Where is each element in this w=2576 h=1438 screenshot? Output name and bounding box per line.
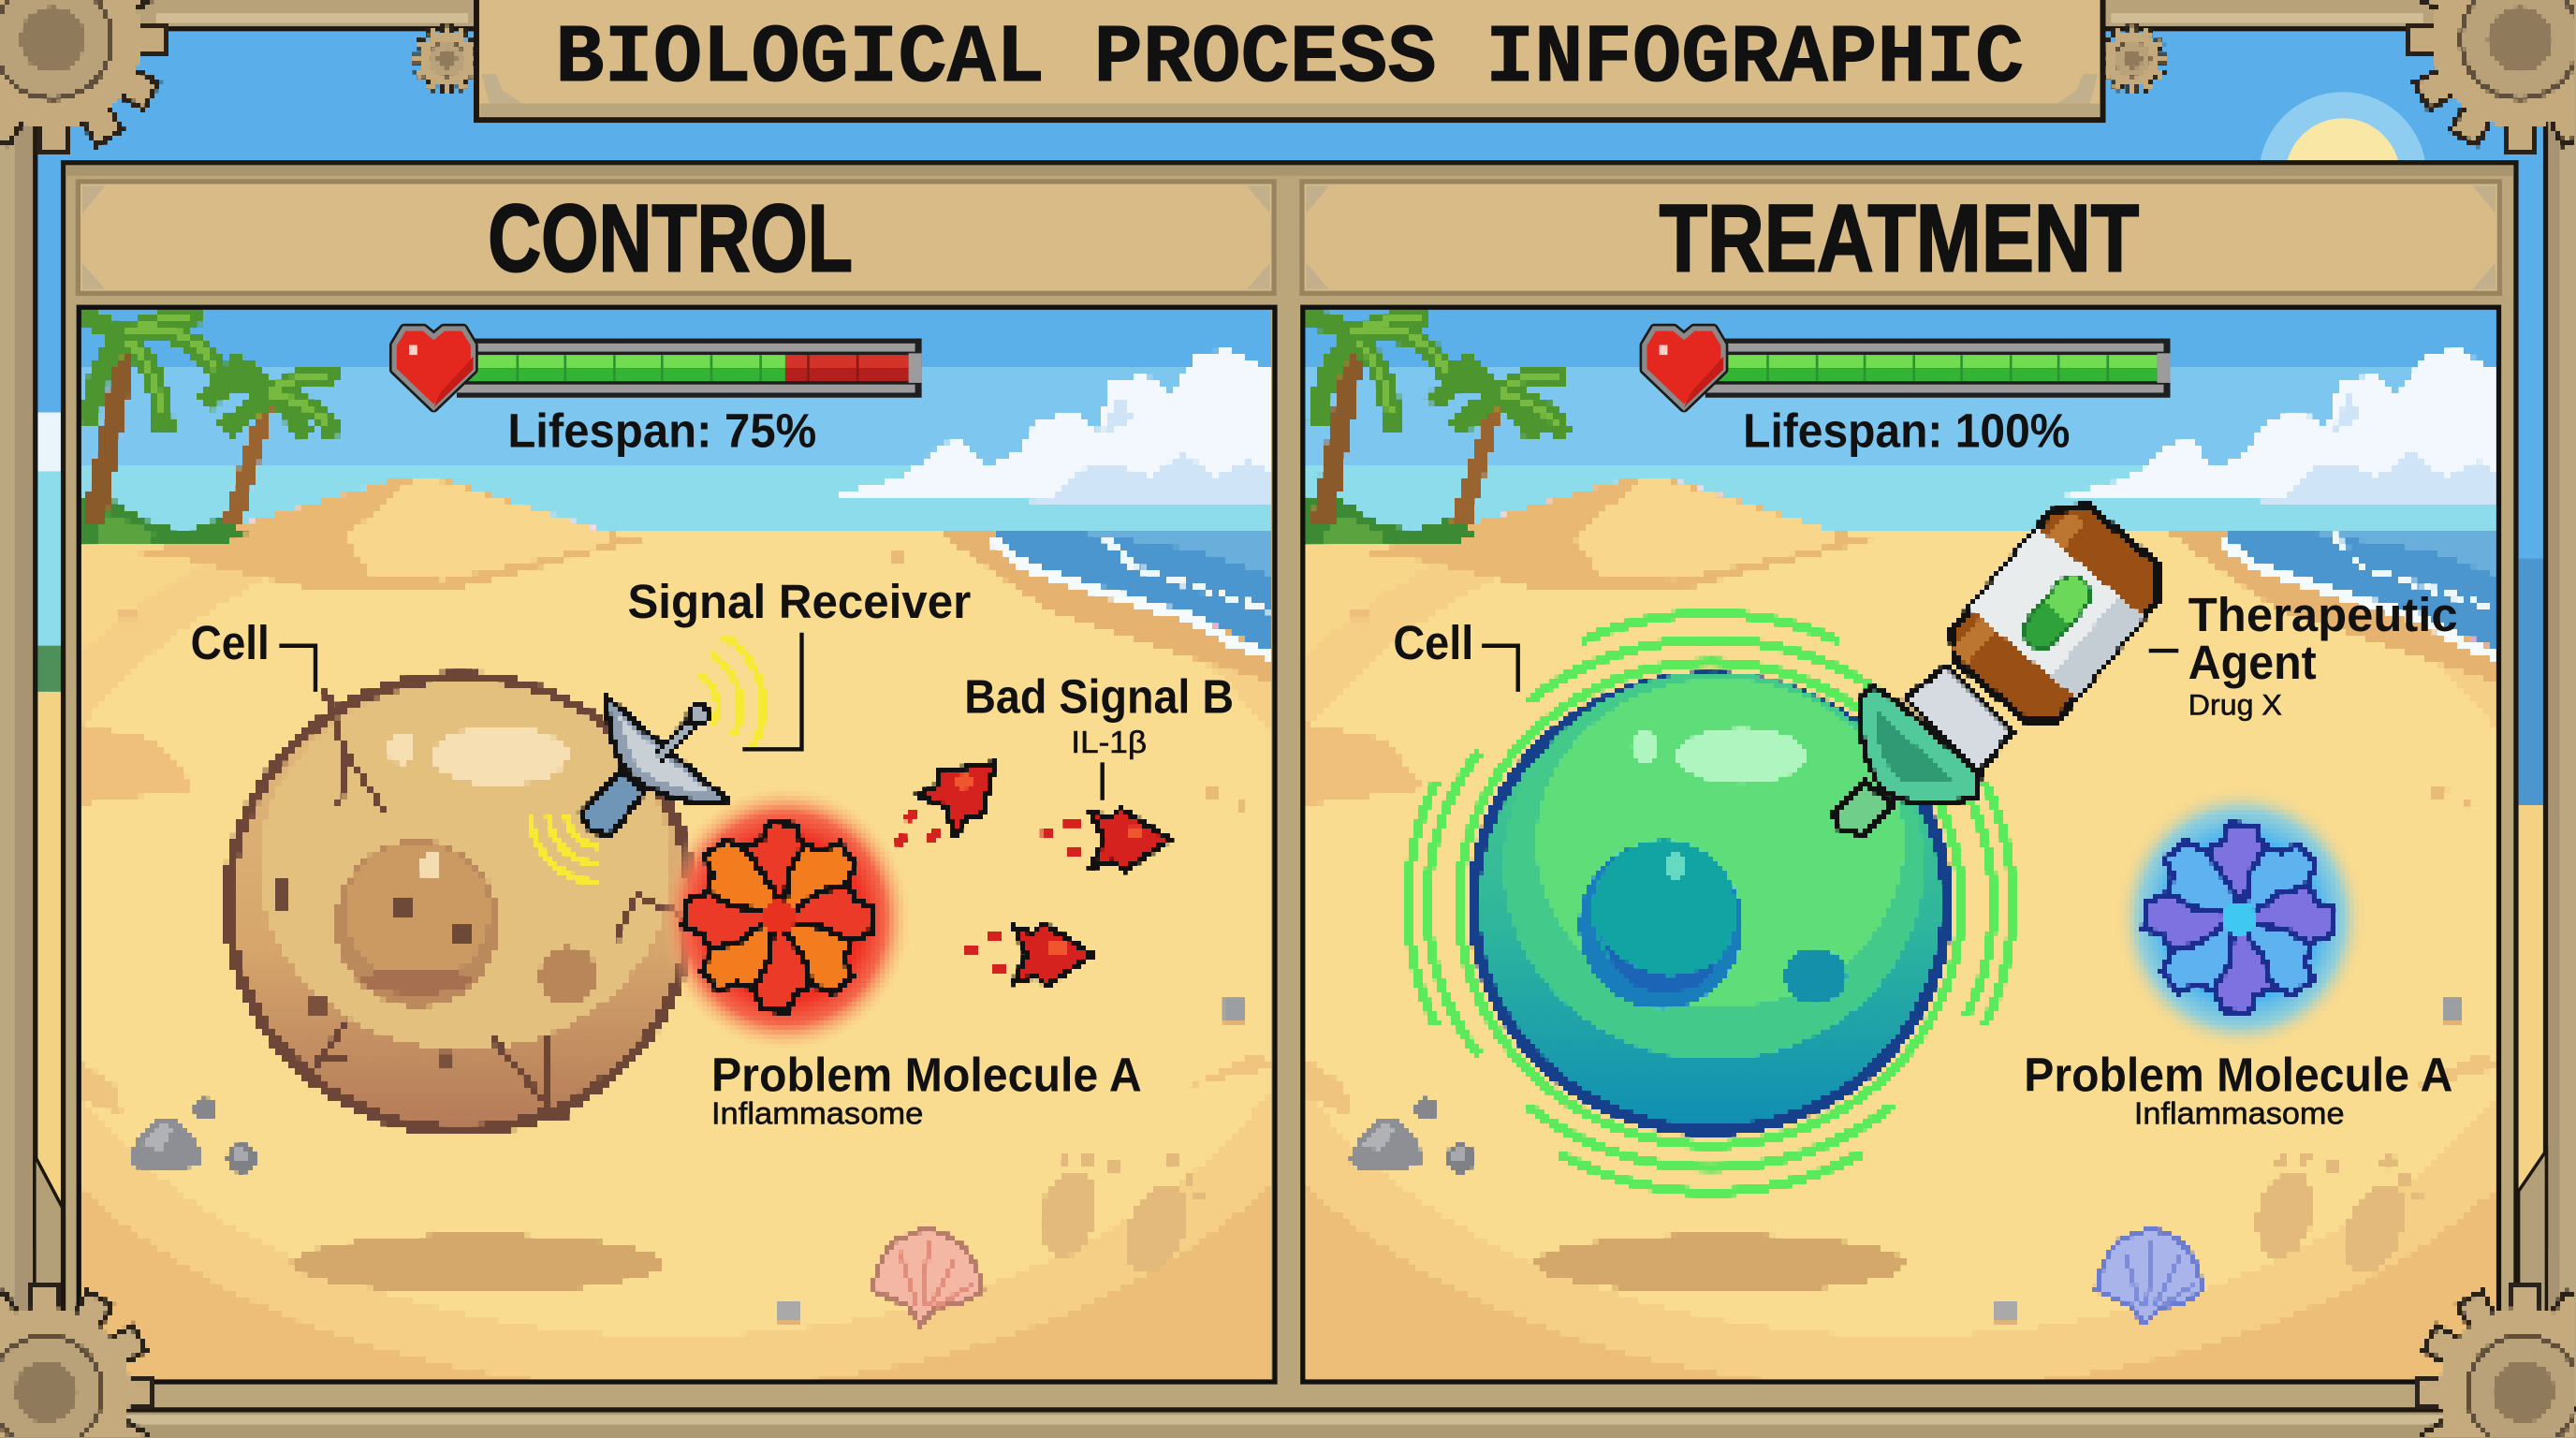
control header plate	[78, 182, 1274, 293]
icon: bad signal arrows	[879, 740, 1170, 986]
control beach scene background	[80, 309, 1271, 1380]
cell: damaged	[228, 677, 694, 1131]
icon: therapeutic agent bottle with dropper	[1834, 491, 2175, 835]
panel: treatment	[1299, 179, 2502, 1385]
label: therapeutic agent: Drug X	[2188, 687, 2282, 721]
label: therapeutic agent	[2149, 588, 2458, 721]
label: signal receiver	[627, 575, 971, 749]
label: problem molecule A: Problem Molecule A	[711, 1048, 1142, 1101]
label: problem molecule A: Inflammasome	[711, 1096, 923, 1131]
label: signal receiver: Signal Receiver	[627, 575, 971, 628]
label: cell	[1393, 616, 1518, 692]
title plate	[476, 0, 2103, 120]
title text: BIOLOGICAL PROCESS INFOGRAPHIC	[555, 13, 2024, 106]
beach props: rocks and shell	[128, 999, 1244, 1326]
treatment beach scene background	[1305, 309, 2496, 1380]
icon: problem molecule A, neutralised	[2116, 787, 2365, 1050]
cell: healthy with green glow rings	[1408, 613, 2012, 1192]
label: therapeutic agent: Therapeutic	[2188, 588, 2458, 641]
label: problem molecule A: Problem Molecule A	[2024, 1048, 2452, 1101]
icon: signal receiver dish with yellow waves	[531, 636, 763, 882]
treatment scene border	[1303, 307, 2499, 1382]
label: cell	[191, 616, 315, 692]
lifespan health bar: 75%	[394, 329, 922, 457]
treatment header plate: TREATMENT	[1660, 185, 2139, 292]
label: cell: Cell	[1393, 616, 1473, 669]
label: problem molecule A: Inflammasome	[2134, 1096, 2345, 1131]
lifespan health bar: 75%: Lifespan: 75%	[507, 404, 816, 457]
control header plate: CONTROL	[488, 185, 853, 292]
label: bad signal B: IL-1β	[1071, 726, 1147, 760]
label: therapeutic agent: Agent	[2188, 636, 2317, 689]
label: bad signal B: Bad Signal B	[964, 670, 1234, 724]
treatment header plate	[1302, 182, 2499, 293]
icon: problem molecule A, activated	[661, 787, 910, 1050]
label: problem molecule A	[2024, 1048, 2452, 1131]
lifespan health bar: 100%: Lifespan: 100%	[1743, 404, 2070, 457]
label: problem molecule A	[711, 1048, 1142, 1131]
lifespan health bar: 100%	[1645, 329, 2170, 457]
control scene border	[79, 307, 1275, 1382]
label: bad signal B	[964, 670, 1234, 800]
beach props: rocks and blue shell	[1349, 999, 2461, 1326]
panel: control	[75, 179, 1278, 1385]
label: cell: Cell	[191, 616, 270, 669]
